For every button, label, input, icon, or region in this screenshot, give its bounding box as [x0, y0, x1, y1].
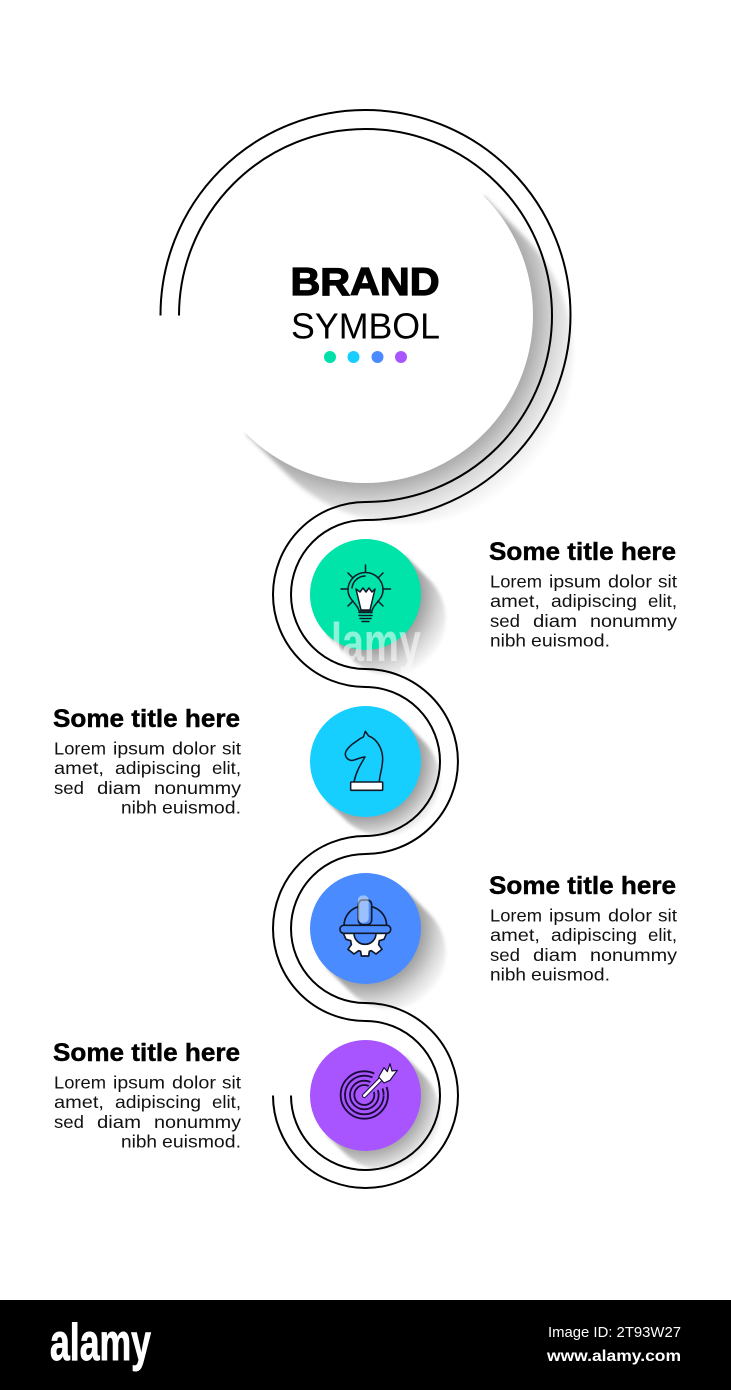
text block 2: [53, 705, 241, 818]
body 4: ipsum: [113, 1072, 165, 1092]
icon: light bulb: [341, 565, 390, 622]
step 2 badge: chess knight: [310, 706, 421, 817]
body 1: nibh: [490, 631, 526, 651]
body 4: euismod.: [162, 1132, 241, 1152]
body 1: euismod.: [531, 631, 610, 651]
body 2: ipsum: [113, 738, 165, 758]
step 3 badge: helmet and gear: [310, 873, 421, 984]
body 1: dolor: [608, 572, 652, 592]
heading 1: Some title here: [489, 538, 676, 566]
icon: helmet with gear: [340, 895, 391, 956]
body 3: Lorem: [490, 906, 542, 926]
shadow: main circle: [246, 196, 573, 523]
body 3: adipiscing: [551, 925, 637, 945]
serpentine double line path: [160, 110, 570, 1188]
body 1: Lorem: [490, 572, 542, 592]
body 1: sed: [490, 611, 520, 631]
body 1: sit: [658, 572, 677, 592]
step 1 badge: light bulb: [310, 539, 421, 673]
brand title: [290, 261, 440, 346]
watermark: lamy: [331, 611, 421, 673]
body 3: amet,: [490, 925, 540, 945]
text block 3: [489, 872, 677, 985]
body 3: nibh: [490, 965, 526, 985]
body 4: sed: [54, 1112, 84, 1132]
body 2: [54, 738, 241, 818]
body 3: dolor: [608, 906, 652, 926]
body 4: elit,: [212, 1092, 241, 1112]
body 1: ipsum: [549, 572, 601, 592]
body 3: sit: [658, 906, 677, 926]
body 3: sed: [490, 945, 520, 965]
body 4: sit: [222, 1072, 241, 1092]
footer bar: [0, 1300, 731, 1390]
body 1: diam: [533, 611, 577, 631]
heading 3: Some title here: [489, 872, 676, 900]
body 3: nonummy: [590, 945, 677, 965]
body 2: sit: [222, 738, 241, 758]
body 1: amet,: [490, 591, 540, 611]
body 1: adipiscing: [551, 591, 637, 611]
body 2: sed: [54, 778, 84, 798]
body 2: nibh: [121, 798, 157, 818]
body 2: elit,: [212, 758, 241, 778]
body 2: diam: [97, 778, 141, 798]
brand title: SYMBOL: [291, 306, 440, 346]
icon: target with arrow: [341, 1064, 397, 1119]
brand title: BRAND: [290, 261, 440, 304]
body 1: nonummy: [590, 611, 677, 631]
alamy logo: alamy: [50, 1314, 151, 1372]
body 2: Lorem: [54, 738, 106, 758]
body 2: dolor: [172, 738, 216, 758]
step 4 badge: target: [310, 1040, 421, 1151]
image id: Image ID: 2T93W27: [548, 1324, 681, 1341]
body 2: nonummy: [154, 778, 241, 798]
icon: chess knight: [345, 731, 383, 790]
body 3: [490, 906, 677, 985]
body 4: adipiscing: [115, 1092, 201, 1112]
text block 4: [53, 1039, 241, 1152]
body 4: diam: [97, 1112, 141, 1132]
body 4: Lorem: [54, 1072, 106, 1092]
text block 1: [489, 538, 677, 651]
body 3: ipsum: [549, 906, 601, 926]
body 3: diam: [533, 945, 577, 965]
body 2: euismod.: [162, 798, 241, 818]
body 4: nibh: [121, 1132, 157, 1152]
body 4: [54, 1072, 241, 1152]
body 4: dolor: [172, 1072, 216, 1092]
body 3: elit,: [648, 925, 677, 945]
body 2: amet,: [54, 758, 104, 778]
main white circle: [197, 147, 533, 483]
shadows: step circles: [326, 555, 446, 1170]
body 4: amet,: [54, 1092, 104, 1112]
website: www.alamy.com: [546, 1348, 681, 1365]
body 2: adipiscing: [115, 758, 201, 778]
body 4: nonummy: [154, 1112, 241, 1132]
brand colour dots: [324, 351, 407, 363]
body 1: [490, 572, 677, 651]
heading 2: Some title here: [53, 705, 240, 733]
body 3: euismod.: [531, 965, 610, 985]
heading 4: Some title here: [53, 1039, 240, 1067]
body 1: elit,: [648, 591, 677, 611]
